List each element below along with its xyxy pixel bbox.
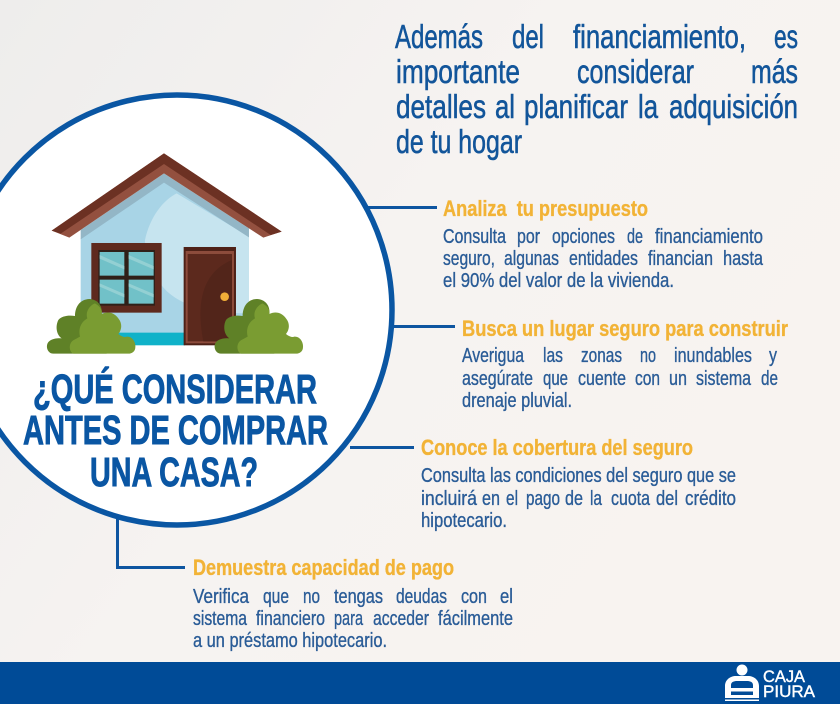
intro text: planificar: [524, 88, 628, 125]
body text: cuente: [578, 368, 626, 390]
intro text: la: [638, 88, 659, 125]
heading: Analiza tu presupuesto: [443, 196, 648, 221]
body text: un: [669, 368, 687, 390]
body text: y: [769, 345, 777, 367]
body text: asegúrate: [462, 368, 533, 390]
body text: crédito: [685, 488, 736, 510]
body text: Verifica: [193, 586, 250, 608]
body text: zonas: [581, 345, 622, 367]
intro text: detalles: [396, 88, 486, 125]
body text: acceder: [373, 608, 429, 630]
body text: de: [565, 488, 583, 510]
circle heading: UNA CASA?: [90, 449, 258, 495]
intro text: importante: [396, 53, 520, 90]
wall light swoosh: [145, 193, 249, 313]
circle heading: ¿QUÉ CONSIDERAR: [33, 366, 317, 412]
right bush: [215, 299, 303, 354]
body text: para: [334, 608, 364, 630]
logo wordmark: PIURA: [763, 682, 816, 701]
icon: house illustration: [47, 153, 303, 354]
body text: que: [543, 368, 568, 390]
left bush: [47, 299, 135, 354]
body text: el: [500, 586, 513, 608]
body text: deudas: [396, 586, 447, 608]
body text: de: [761, 368, 778, 390]
body text: drenaje pluvial.: [462, 390, 572, 412]
body text: [462, 345, 778, 412]
body text: seguro,: [443, 248, 495, 270]
logo wordmark: [763, 667, 816, 701]
footer bar: [0, 662, 840, 704]
body text: financiero: [256, 608, 325, 630]
body text: con: [461, 586, 487, 608]
door: [184, 247, 236, 345]
intro text: de tu hogar: [396, 123, 522, 160]
body text: no: [640, 345, 656, 367]
body text: del: [656, 488, 678, 510]
body text: de: [627, 226, 643, 248]
body text: entidades: [569, 248, 638, 270]
body text: que: [263, 586, 289, 608]
wall shadow under the roof: [81, 173, 249, 239]
body text: Averigua: [462, 345, 525, 367]
body text: fácilmente: [438, 608, 513, 630]
logo wordmark: CAJA: [763, 667, 806, 686]
body text: sistema: [696, 368, 752, 390]
body text: por: [517, 226, 540, 248]
section: Demuestra capacidad de pago: [193, 555, 513, 652]
connector lines: [118, 208, 455, 568]
body text: tengas: [334, 586, 383, 608]
circle heading: [23, 366, 328, 495]
body text: cuota: [611, 488, 651, 510]
heading: Conoce la cobertura del seguro: [421, 435, 693, 460]
body text: el 90% del valor de la vivienda.: [443, 270, 674, 292]
body text: con: [635, 368, 660, 390]
body text: [193, 586, 513, 652]
section: Analiza tu presupuesto: [443, 196, 764, 292]
body text: las: [543, 345, 563, 367]
intro text: es: [774, 18, 798, 55]
intro text: [395, 18, 798, 160]
body text: inundables: [674, 345, 752, 367]
body text: algunas: [504, 248, 559, 270]
intro text: adquisición: [669, 88, 798, 125]
body text: no: [303, 586, 320, 608]
intro text: financiamiento,: [573, 18, 746, 55]
intro text: del: [512, 18, 544, 55]
body text: en: [482, 488, 500, 510]
intro text: Además: [395, 18, 483, 55]
logo icon: [725, 664, 759, 701]
body text: incluirá: [421, 488, 478, 510]
body text: [421, 465, 736, 532]
house wall: [81, 182, 249, 343]
circle panel: [0, 95, 392, 525]
body text: la: [590, 488, 603, 510]
house base strip: [113, 333, 185, 345]
body text: Consulta las condiciones del seguro que se: [421, 465, 736, 487]
body text: opciones: [552, 226, 615, 248]
body text: hasta: [723, 248, 764, 270]
body text: a un préstamo hipotecario.: [193, 630, 387, 652]
intro text: considerar: [577, 53, 694, 90]
section: Busca un lugar seguro para construir: [462, 316, 788, 412]
roof: [52, 153, 282, 238]
section: Conoce la cobertura del seguro: [421, 435, 736, 532]
body text: pago: [526, 488, 560, 510]
circle heading: ANTES DE COMPRAR: [23, 407, 328, 453]
body text: el: [506, 488, 518, 510]
body text: Consulta: [443, 226, 507, 248]
window: [91, 243, 162, 313]
body text: financian: [648, 248, 713, 270]
heading: Demuestra capacidad de pago: [193, 555, 454, 580]
body text: hipotecario.: [421, 510, 507, 532]
intro text: más: [751, 53, 798, 90]
intro text: al: [495, 88, 515, 125]
body text: financiamiento: [655, 226, 763, 248]
logo: Caja Piura: [725, 664, 816, 701]
body text: [443, 226, 764, 292]
body text: sistema: [193, 608, 248, 630]
